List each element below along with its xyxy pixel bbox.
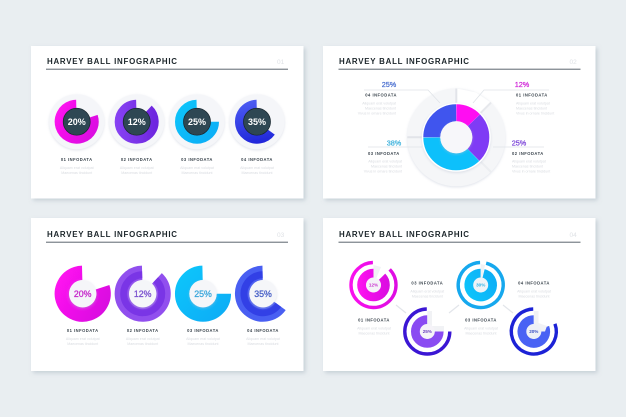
panel 04 captions: 01 INFODATA <box>358 318 390 322</box>
panel 01 heading rule <box>46 69 288 70</box>
panel: 04 double-ring balls <box>323 218 596 371</box>
label 04: 04 INFODATA <box>365 92 397 98</box>
connector lines <box>396 305 513 313</box>
panel 03 card <box>31 218 304 371</box>
ball 02 12% <box>109 94 164 149</box>
panel 03 captions: Aliquam erat volutpat <box>186 337 220 341</box>
panel 03 captions: 03 INFODATA <box>187 328 219 333</box>
double ring 20% <box>505 303 563 360</box>
panel 01 captions: Maecenas tincidunt <box>121 171 152 175</box>
panel 03 captions: Maecenas tincidunt <box>67 342 98 346</box>
panel 01 captions: Maecenas tincidunt <box>61 171 92 175</box>
double ring 30%: 30% <box>476 283 485 288</box>
panel 01 captions: 01 INFODATA <box>61 157 93 162</box>
panel 03 captions: 04 INFODATA <box>247 328 279 333</box>
panel: 03 large open rings <box>31 218 304 371</box>
label 03: Aliquam erat volutpat <box>368 160 402 164</box>
panel 04 heading rule <box>338 242 580 243</box>
panel 03 number: 03 <box>277 232 285 239</box>
double ring 12%: 12% <box>369 283 378 288</box>
double ring 30% <box>453 258 508 312</box>
panel 04 captions: Aliquam erat volutpat <box>464 326 498 330</box>
label 01: Maecenas tincidunt <box>516 106 547 110</box>
panel 04 heading: HARVEY BALL INFOGRAPHIC <box>339 230 469 239</box>
label 04: 25% <box>382 80 397 89</box>
double ring 20%: 20% <box>529 329 538 334</box>
label 02: Vivus in ornare tincidunt <box>512 170 550 174</box>
donut chart <box>422 103 491 172</box>
label 02: 02 INFODATA <box>512 151 544 156</box>
label 01 <box>515 80 554 116</box>
panel 04 captions: Aliquam erat volutpat <box>517 290 551 294</box>
panel 01 captions: 03 INFODATA <box>181 157 213 162</box>
panel 01 captions: 04 INFODATA <box>241 157 273 162</box>
panel 03 captions: Aliquam erat volutpat <box>246 337 280 341</box>
label 01: Aliquam erat volutpat <box>516 102 550 106</box>
panel 01 number: 01 <box>277 59 285 66</box>
ball 04 35% <box>230 94 284 149</box>
panel 01 captions: Aliquam erat volutpat <box>180 166 214 170</box>
panel 03 captions: Maecenas tincidunt <box>248 342 278 346</box>
label 04: Maecenas tincidunt <box>365 106 396 110</box>
panel 03 heading: HARVEY BALL INFOGRAPHIC <box>47 230 177 239</box>
ring 02 12% <box>113 264 172 323</box>
panel 04 captions <box>357 280 551 336</box>
panel 04 captions: 03 INFODATA <box>465 318 497 322</box>
ball 01 20%: 20% <box>68 117 86 127</box>
ring 01 20%: 20% <box>74 289 92 299</box>
label 02 <box>512 138 550 174</box>
panel 03 captions: Aliquam erat volutpat <box>126 337 160 341</box>
panel 04 captions: Maecenas tincidunt <box>519 294 549 298</box>
label 01: Vivus in ornare tincidunt <box>516 112 554 116</box>
panel 01 captions: Aliquam erat volutpat <box>60 166 94 170</box>
panel 03 captions <box>66 328 280 346</box>
label 02: Aliquam erat volutpat <box>512 160 546 164</box>
panel 01 heading: HARVEY BALL INFOGRAPHIC <box>47 57 177 66</box>
panel 03 captions: Maecenas tincidunt <box>188 342 218 346</box>
panel 04 captions: Aliquam erat volutpat <box>410 290 444 294</box>
panel 01 captions: Maecenas tincidunt <box>242 171 272 175</box>
panel: 01 four dark-centred harvey balls <box>31 46 304 198</box>
panel 01 captions <box>60 157 274 175</box>
double ring 12% <box>342 253 405 317</box>
panel 01 card <box>31 46 304 198</box>
panel 03 heading rule <box>46 242 288 243</box>
panel 01 captions: Maecenas tincidunt <box>182 171 212 175</box>
panel 04 captions: Maecenas tincidunt <box>359 332 389 336</box>
ball 01 20% <box>49 94 104 149</box>
ball 03 25%: 25% <box>188 117 206 127</box>
ring 02 12%: 12% <box>134 289 152 299</box>
label 01: 12% <box>515 80 530 89</box>
panel 03 captions: Maecenas tincidunt <box>127 342 158 346</box>
panel 01 captions: 02 INFODATA <box>121 157 153 162</box>
ring 01 20% <box>56 267 109 320</box>
panel 01 captions: Aliquam erat volutpat <box>120 166 154 170</box>
double ring 25%: 25% <box>423 329 432 334</box>
panel 04 captions: 03 INFODATA <box>411 280 443 286</box>
ball 04 35%: 35% <box>248 117 266 127</box>
label 01: 01 INFODATA <box>516 92 548 98</box>
panel 03 captions: Aliquam erat volutpat <box>66 337 100 341</box>
panel: 02 segmented donut <box>323 46 596 198</box>
label 02: 25% <box>512 138 527 148</box>
ring 04 35% <box>234 265 292 323</box>
ball 02 12%: 12% <box>128 117 146 127</box>
panel 03 captions: 01 INFODATA <box>67 328 99 333</box>
label 03 <box>364 138 402 174</box>
panel 03 captions: 02 INFODATA <box>127 328 159 333</box>
panel 04 card <box>323 218 596 371</box>
double ring 25% <box>405 309 450 354</box>
ring 04 35%: 35% <box>254 289 272 299</box>
label 03: Vivus in ornare tincidunt <box>364 170 402 174</box>
panel 02 heading: HARVEY BALL INFOGRAPHIC <box>339 57 469 66</box>
ring 03 25% <box>182 273 224 315</box>
label 04: Aliquam erat volutpat <box>362 102 396 106</box>
panel 04 captions: Maecenas tincidunt <box>466 332 496 336</box>
label 03: 38% <box>387 138 402 148</box>
label 04: Vivus in ornare tincidunt <box>358 112 396 116</box>
panel 04 number: 04 <box>570 232 577 239</box>
ball 03 25% <box>170 94 224 149</box>
panel 02 number: 02 <box>570 59 577 66</box>
panel 01 captions: Aliquam erat volutpat <box>240 166 274 170</box>
panel 04 captions: Maecenas tincidunt <box>412 294 443 298</box>
leader lines <box>364 90 549 147</box>
panel 04 captions: 04 INFODATA <box>518 280 550 286</box>
panel 04 captions: Aliquam erat volutpat <box>357 326 391 330</box>
label 02: Maecenas tincidunt <box>512 164 543 168</box>
label 04 <box>358 80 397 116</box>
panel 02 heading rule <box>338 69 580 70</box>
label 03: 03 INFODATA <box>368 151 400 156</box>
ring 03 25%: 25% <box>194 289 212 299</box>
outer pale ring <box>407 88 505 186</box>
panel 02 card <box>323 46 596 198</box>
label 03: Maecenas tincidunt <box>371 164 402 168</box>
